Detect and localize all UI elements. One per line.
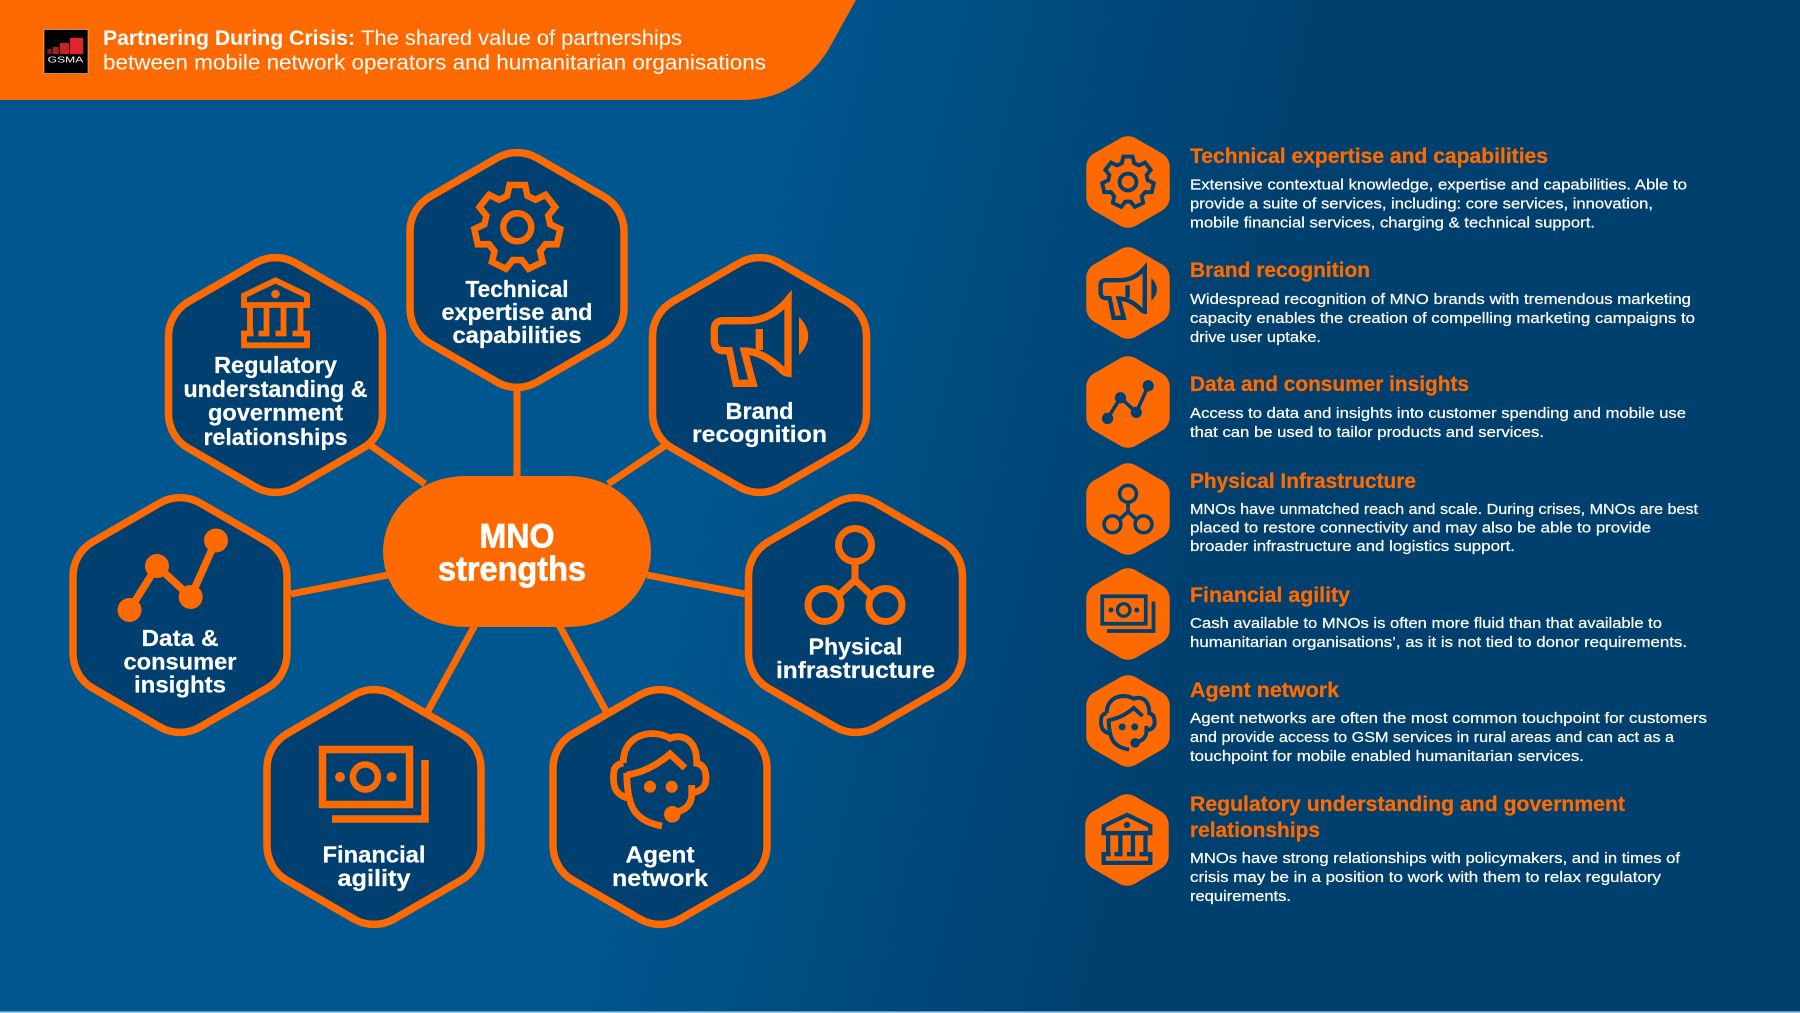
description: Extensive contextual knowledge, expertise and capabilities. Able to bbox=[1190, 176, 1687, 194]
description: humanitarian organisations’, as it is not tied to donor requirements. bbox=[1190, 634, 1687, 651]
hexagon: Agent network bbox=[553, 690, 767, 924]
hexagon: Brand recognition bbox=[652, 258, 866, 492]
description: drive user uptake. bbox=[1190, 329, 1321, 346]
label: Data & bbox=[142, 625, 218, 651]
list item: Brand recognition bbox=[1086, 247, 1695, 346]
label: Agent bbox=[626, 842, 695, 868]
icon: megaphone small bbox=[1101, 268, 1157, 318]
description: and provide access to GSM services in rural areas and can act as a bbox=[1190, 729, 1675, 746]
logo: GSMA bbox=[44, 30, 88, 74]
description: capacity enables the creation of compelling marketing campaigns to bbox=[1190, 310, 1695, 327]
icon: government building bbox=[241, 280, 310, 345]
list item: Physical Infrastructure bbox=[1086, 463, 1699, 555]
label: relationships bbox=[204, 424, 348, 450]
icon: banknotes bbox=[322, 750, 425, 819]
central node: MNO strengths: strengths bbox=[438, 550, 586, 588]
description bbox=[1190, 710, 1707, 765]
label: network bbox=[612, 865, 708, 891]
label: government bbox=[208, 400, 343, 426]
description: Access to data and insights into customer spending and mobile use bbox=[1190, 405, 1686, 422]
description bbox=[1190, 850, 1681, 905]
description: MNOs have unmatched reach and scale. During crises, MNOs are best bbox=[1190, 501, 1699, 518]
heading: Financial agility bbox=[1190, 584, 1350, 607]
label: expertise and bbox=[442, 299, 592, 325]
label: recognition bbox=[692, 421, 827, 447]
label: agility bbox=[338, 865, 411, 891]
hexagon: Physical infrastructure bbox=[748, 498, 962, 732]
heading bbox=[1190, 793, 1625, 842]
heading: Technical expertise and capabilities bbox=[1190, 145, 1548, 168]
label: infrastructure bbox=[776, 657, 935, 683]
label bbox=[322, 842, 426, 891]
label: insights bbox=[134, 672, 226, 698]
connector lines bbox=[291, 391, 745, 711]
label bbox=[776, 634, 935, 683]
central node: MNO strengths: MNO bbox=[480, 518, 554, 556]
description: touchpoint for mobile enabled humanitarian services. bbox=[1190, 748, 1584, 765]
label bbox=[692, 398, 827, 447]
icon: banknotes small bbox=[1102, 596, 1154, 631]
heading: Agent network bbox=[1190, 679, 1339, 702]
icon: network nodes small bbox=[1104, 485, 1152, 533]
label: capabilities bbox=[452, 322, 582, 348]
list item: Technical expertise and capabilities bbox=[1086, 136, 1687, 232]
label: Technical bbox=[466, 276, 568, 302]
header banner bbox=[0, 0, 856, 100]
icon: megaphone bbox=[714, 300, 808, 383]
description bbox=[1190, 291, 1695, 346]
hexagon: Data and consumer insights bbox=[73, 498, 287, 732]
heading: Physical Infrastructure bbox=[1190, 470, 1416, 493]
heading: relationships bbox=[1190, 819, 1320, 842]
label: Brand bbox=[726, 398, 794, 424]
label bbox=[442, 276, 592, 348]
hexagon: Technical expertise and capabilities bbox=[410, 153, 624, 387]
icon: gear small bbox=[1102, 157, 1154, 207]
header title: between mobile network operators and humanitarian organisations bbox=[103, 52, 766, 75]
icon: agent small bbox=[1101, 696, 1155, 750]
description: crisis may be in a position to work with them to relax regulatory bbox=[1190, 869, 1662, 886]
label bbox=[612, 842, 708, 891]
label: understanding & bbox=[184, 376, 368, 402]
label bbox=[184, 352, 368, 450]
icon: line chart bbox=[118, 528, 228, 622]
icon: line chart small bbox=[1102, 380, 1154, 424]
icon: agent with headset bbox=[613, 734, 706, 826]
list item: Data and consumer insights bbox=[1086, 356, 1686, 448]
description bbox=[1190, 405, 1686, 441]
heading: Brand recognition bbox=[1190, 259, 1370, 282]
description: broader infrastructure and logistics support. bbox=[1190, 538, 1515, 555]
description: Agent networks are often the most common touchpoint for customers bbox=[1190, 710, 1707, 727]
label: Physical bbox=[808, 634, 902, 660]
description: Cash available to MNOs is often more fluid than that available to bbox=[1190, 615, 1662, 632]
description bbox=[1190, 615, 1687, 651]
header title: Partnering During Crisis: bbox=[103, 27, 355, 50]
label: Financial bbox=[322, 842, 426, 868]
description: placed to restore connectivity and may also be able to provide bbox=[1190, 520, 1651, 536]
description: requirements. bbox=[1190, 888, 1291, 905]
label bbox=[124, 625, 237, 698]
icon: network nodes bbox=[808, 528, 902, 622]
list item: Regulatory understanding bbox=[1085, 793, 1681, 905]
heading: Data and consumer insights bbox=[1190, 373, 1469, 396]
list item: Agent network bbox=[1086, 675, 1707, 767]
description bbox=[1190, 176, 1687, 232]
central node: MNO strengths bbox=[383, 476, 651, 627]
logo: GSMA: GSMA bbox=[48, 56, 84, 65]
description: mobile financial services, charging & technical support. bbox=[1190, 214, 1595, 232]
header title: The shared value of partnerships bbox=[361, 27, 682, 50]
description: provide a suite of services, including: core services, innovation, bbox=[1190, 196, 1653, 212]
icon: government building small bbox=[1101, 815, 1153, 863]
label: Regulatory bbox=[214, 352, 337, 378]
list item: Financial agility bbox=[1086, 568, 1687, 660]
header title bbox=[103, 27, 766, 75]
description bbox=[1190, 501, 1699, 555]
heading: Regulatory understanding and government bbox=[1190, 793, 1625, 816]
icon: gear bbox=[474, 185, 560, 269]
hexagon: Financial agility bbox=[267, 690, 481, 924]
description: MNOs have strong relationships with policymakers, and in times of bbox=[1190, 850, 1681, 867]
label: consumer bbox=[124, 648, 237, 674]
hexagon: Regulatory understanding bbox=[168, 258, 382, 492]
description: that can be used to tailor products and services. bbox=[1190, 424, 1544, 441]
description: Widespread recognition of MNO brands with tremendous marketing bbox=[1190, 291, 1691, 308]
